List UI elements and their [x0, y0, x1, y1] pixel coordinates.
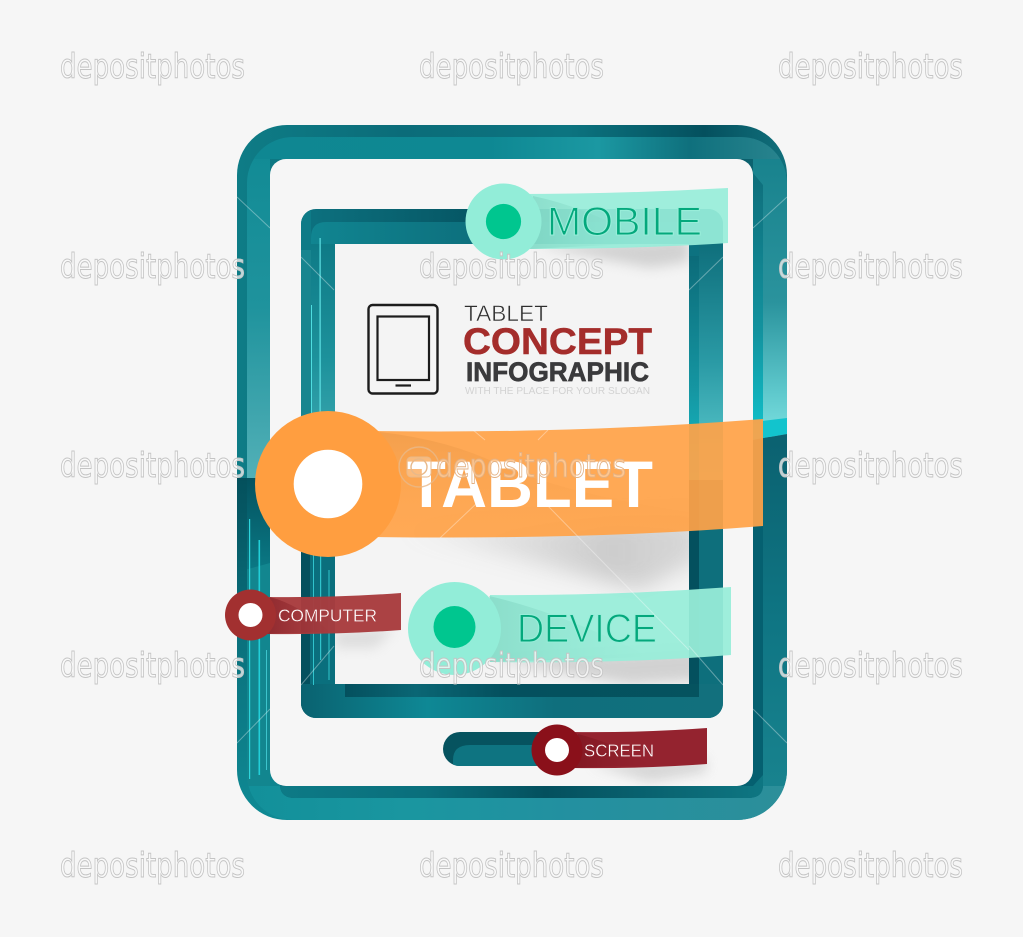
watermark grid: depositphotos: [778, 846, 963, 886]
title block: [463, 301, 652, 397]
watermark grid: depositphotos: [419, 247, 604, 287]
ribbon: device: [490, 587, 731, 662]
watermark grid: depositphotos: [60, 646, 245, 686]
tag: device: [408, 582, 731, 675]
home button: [443, 732, 539, 766]
watermark grid: depositphotos: [60, 47, 245, 87]
ribbon shadows: [335, 238, 706, 782]
watermark grid: depositphotos: [60, 446, 245, 486]
circle: computer: [225, 590, 276, 640]
circle: screen: [532, 724, 582, 776]
label: computer: COMPUTER: [278, 606, 377, 626]
circle: mobile: [466, 184, 542, 260]
tag: screen: [532, 724, 707, 776]
label: tablet: TABLET: [407, 447, 653, 521]
watermark grid: depositphotos: [419, 47, 604, 87]
watermark grid: depositphotos: [778, 646, 963, 686]
white tablet body: [270, 159, 753, 786]
watermark grid: depositphotos: [60, 846, 245, 886]
central watermark with camera logo: depositphotos: [436, 447, 626, 485]
ribbon: tablet: [375, 419, 763, 538]
watermark grid: depositphotos: [60, 247, 245, 287]
cyan light streaks: [249, 519, 250, 779]
circle: tablet: [255, 411, 401, 557]
slogan: WITH THE PLACE FOR YOUR SLOGAN: [465, 386, 650, 397]
inner edge bands: [753, 173, 763, 440]
central watermark with camera logo: [399, 447, 626, 487]
title line: tablet: TABLET: [464, 301, 548, 326]
ribbon: screen: [570, 728, 707, 768]
label: mobile: MOBILE: [547, 200, 702, 244]
tag: computer: [225, 590, 401, 640]
watermark grid: depositphotos: [419, 646, 604, 686]
tag: mobile: [466, 184, 728, 260]
watermark grid: depositphotos: [778, 446, 963, 486]
tablet outer frame: [237, 125, 787, 820]
ribbon: computer: [265, 593, 401, 634]
ribbon: mobile: [515, 188, 728, 249]
label: screen: SCREEN: [584, 740, 654, 760]
tag: tablet: [255, 411, 763, 557]
title line: infographic: INFOGRAPHIC: [466, 357, 649, 387]
watermark grid: depositphotos: [778, 247, 963, 287]
title line: concept: CONCEPT: [463, 321, 652, 362]
watermark grid: depositphotos: [778, 47, 963, 87]
screen area: [335, 244, 689, 684]
label: device: DEVICE: [517, 607, 657, 651]
icon: tablet outline: [368, 305, 438, 394]
watermark grid: [60, 47, 963, 886]
watermark grid: depositphotos: [419, 846, 604, 886]
circle: device: [408, 582, 501, 675]
tablet inner screen frame: [301, 209, 723, 718]
